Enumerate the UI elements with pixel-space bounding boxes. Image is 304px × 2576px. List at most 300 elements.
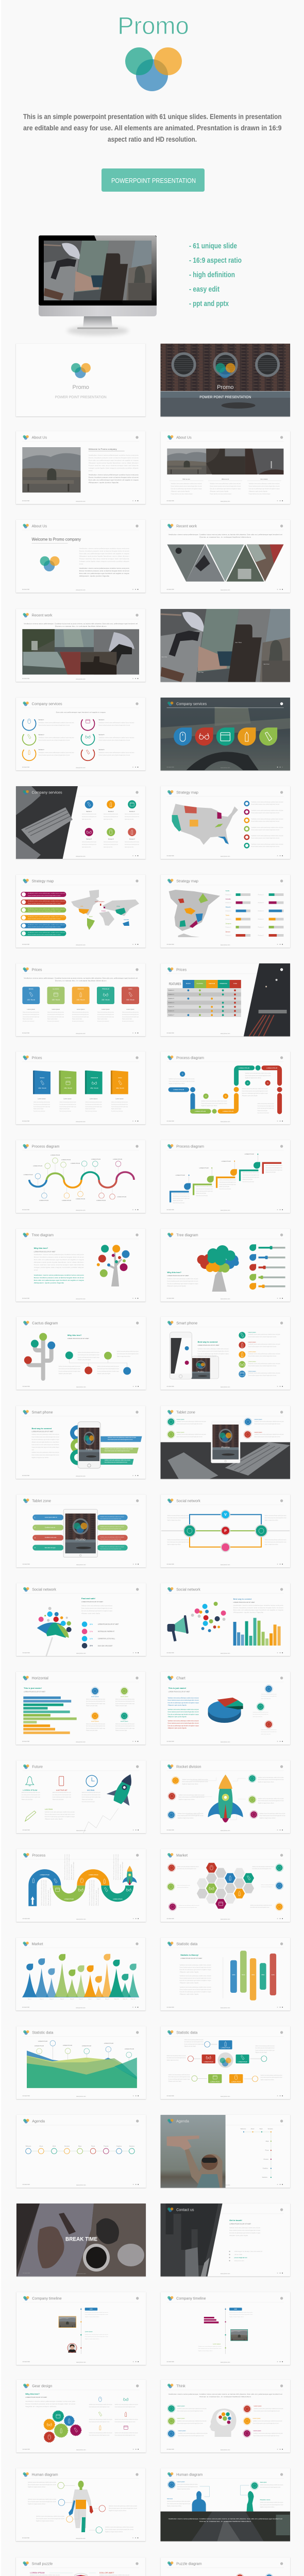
slide 14: Strategy map Spain: Sevilla bbox=[226, 890, 230, 892]
slide 14: Strategy map Spain: Product 1 bbox=[226, 893, 231, 895]
slide 30: Social network megaphone and bars: Best way to connect bbox=[233, 1598, 252, 1600]
slide 15: Prices cards: Lorem ipsum bbox=[52, 1008, 60, 1010]
slide 5: About Us welcome: Welcome to Promo company bbox=[32, 537, 81, 542]
slide 41: Agenda timeline: Welcome bbox=[26, 2145, 31, 2147]
slide 45: Company timeline left: Company timeline bbox=[32, 2296, 62, 2301]
slide 50: Human diagram silhouettes: Human diagram bbox=[176, 2472, 202, 2477]
slide 42: Agenda photo and timeline: Process bbox=[264, 2158, 269, 2160]
slide 24: Smart phone pair bbox=[161, 1317, 290, 1390]
slide 44: Contact us city photo bbox=[161, 2204, 290, 2276]
slide 18: Process diagram pipes: 1 bbox=[182, 1073, 183, 1075]
slide 11: Company services keyboard: Service 6 bbox=[129, 838, 135, 840]
tree with coloured fruit bbox=[97, 1245, 130, 1286]
slide 8: full-bleed photo slices bbox=[161, 609, 290, 682]
slide 38: Statistic data vertical pills: LOREM IPSUM DOLOR SIT AMET bbox=[180, 1957, 202, 1959]
feature list: - high definition bbox=[189, 271, 235, 279]
slide 41: Agenda timeline: About bbox=[39, 2145, 43, 2147]
slide 14: Strategy map Spain: Product 1 bbox=[226, 918, 231, 920]
slide 24: Smart phone pair: Lorem ipsum bbox=[248, 1341, 256, 1343]
slide 22: Tree diagram cloud: Tree diagram bbox=[176, 1233, 198, 1238]
slide 19: Process diagram wave: LOREM IPSUM bbox=[71, 1162, 80, 1164]
slide 34: Rocket division bbox=[161, 1760, 290, 1833]
intro paragraph bbox=[23, 112, 282, 143]
slide 37: Market triangles: Step 5 bbox=[70, 1998, 74, 2000]
slide 21: Tree diagram balls: Tree diagram bbox=[32, 1233, 54, 1238]
slide 48: Think head: Lorem ipsum bbox=[254, 2405, 262, 2407]
slide 11: Company services keyboard: Service 5 bbox=[108, 838, 114, 840]
slide 38: Statistic data vertical pills: 35% bbox=[261, 1974, 265, 1976]
slide 19: Process diagram wave: LOREM IPSUM bbox=[61, 1159, 71, 1161]
slide 15: Prices cards: Lorem ipsum bbox=[126, 1008, 135, 1010]
slide 50: Human diagram silhouettes bbox=[161, 2468, 290, 2541]
slide 8: full-bleed photo slices: Item Four bbox=[264, 663, 269, 665]
slide 44: Contact us city photo: promo.info@mail.com bbox=[234, 2257, 247, 2259]
slide 4: About Us three photos: Who we are bbox=[182, 478, 190, 480]
slide 19: Process diagram wave: LOREM IPSUM bbox=[50, 1154, 60, 1156]
slide 18: Process diagram pipes: 3 bbox=[225, 1095, 227, 1097]
slide 24: Smart phone pair: LOREM IPSUM DOLOR SIT AMET bbox=[198, 1344, 219, 1346]
slide 23: Cactus diagram: Cactus diagram bbox=[32, 1321, 58, 1326]
slide 39: Statistic data area chart: LOREM IPSUM bbox=[125, 2048, 134, 2050]
slide 16: Prices feature table: KING bbox=[233, 982, 238, 985]
slide 29: Social network umbrella: Fast and safe! bbox=[81, 1597, 95, 1600]
slide 16: Prices feature table: Feature 6 bbox=[168, 1010, 174, 1012]
world map: France bbox=[102, 910, 106, 912]
megaphone bbox=[167, 1615, 189, 1641]
slide 22: Tree diagram cloud: Why this tree? bbox=[167, 1271, 182, 1274]
slide 15: Prices cards: Lorem ipsum bbox=[102, 1008, 110, 1010]
slide 29: Social network umbrella: 29% bbox=[90, 1645, 93, 1647]
slide 14: Strategy map Spain: Product 1 bbox=[226, 926, 231, 928]
slide 39: Statistic data area chart bbox=[16, 2026, 146, 2099]
slide 41: Agenda timeline: Agenda bbox=[32, 2119, 45, 2124]
stacked area chart bbox=[27, 2050, 137, 2088]
slide 24: Smart phone pair: Best way to connect bbox=[198, 1341, 218, 1343]
slide 32: Chart 3D pie: Chart bbox=[176, 1676, 185, 1681]
feature list: - easy edit bbox=[189, 285, 219, 294]
slide 27: Tablet zone pills bbox=[16, 1495, 146, 1567]
slide 29: Social network umbrella: 14% bbox=[90, 1638, 93, 1640]
slide 37: Market triangles: Step 1 bbox=[28, 1998, 32, 2000]
slide 39: Statistic data area chart: LOREM IPSUM bbox=[82, 2045, 91, 2047]
slide 27: Tablet zone pills: Lorem ipsum dolor sit bbox=[45, 1517, 57, 1518]
slide 16: Prices feature table: Feature 1 bbox=[168, 989, 174, 991]
slide 25: Smart phone ribbons bbox=[16, 1406, 145, 1479]
slide 15: Prices cards: Vestibulum viverra varius pellentesque. Curabitur luctus erat ac justo viverra, ac lacinia nibh pharetra. Duis odio orci, pellentesque eget hendrerit vel bbox=[24, 977, 138, 979]
slide 35: Process snake with rocket: LOREM IPSUM bbox=[40, 1874, 49, 1876]
slide 9: Company services ring list: Service 2 bbox=[39, 734, 44, 736]
world map: United Kingdom bbox=[95, 901, 104, 903]
slide 44: Contact us city photo: +00 22 4 538 bbox=[234, 2253, 242, 2256]
slide 42: Agenda photo and timeline: Maps bbox=[266, 2140, 269, 2142]
slide 14: Strategy map Spain: Strategy map bbox=[176, 879, 198, 884]
feature list: - 61 unique slide bbox=[189, 242, 237, 250]
phone mockups bbox=[170, 1332, 219, 1379]
slide 37: Market triangles: Step 11 bbox=[123, 1998, 128, 2000]
slide 24: Smart phone pair: Lorem ipsum bbox=[248, 1370, 256, 1372]
slide 18: Process diagram pipes: LOREM IPSUM bbox=[266, 1067, 278, 1069]
slide 50: Human diagram silhouettes: Donec a massa leo, in volutpat facilisis bibendum bbox=[199, 2520, 251, 2522]
slide 39: Statistic data area chart: LOREM IPSUM bbox=[104, 2042, 113, 2044]
world map: China bbox=[116, 905, 120, 907]
slide 31: Horizontal bars: Lorem ipsum bbox=[121, 1696, 128, 1698]
slide 44: Contact us city photo: www.promo.com bbox=[234, 2260, 244, 2262]
slide 19: Process diagram wave: LOREM IPSUM bbox=[113, 1158, 122, 1160]
slide 48: Think head: Lorem ipsum bbox=[178, 2430, 186, 2432]
slide 4: About Us three photos: About Us bbox=[176, 435, 192, 440]
slide 17: Prices product boxes: Prices bbox=[32, 1056, 42, 1060]
logo: three overlapping circles bbox=[125, 47, 182, 91]
slide 42: Agenda photo and timeline: Work bbox=[260, 2128, 263, 2130]
slide 15: Prices cards: Prices bbox=[32, 968, 42, 972]
slide 33: Future rocket bbox=[16, 1760, 146, 1833]
slide 9: Company services ring list bbox=[16, 698, 145, 771]
slide 2: Promo cover on brick wall: Promo bbox=[217, 384, 234, 391]
slide 27: Tablet zone pills: 4 bbox=[35, 1547, 36, 1549]
slide 29: Social network umbrella: Social network bbox=[32, 1587, 56, 1592]
slide 44: Contact us city photo: 1780 Rutgers St, Brooklyn, New York 11234 NY bbox=[234, 2250, 263, 2252]
slide 33: Future rocket: IACINIA bbox=[87, 1789, 95, 1791]
slide 43: Break time photo bbox=[16, 2204, 146, 2276]
slide 50: Human diagram silhouettes: Null amet bbox=[167, 2498, 173, 2500]
feature list: - ppt and pptx bbox=[189, 300, 229, 308]
slide 3: About Us with photo: About Us bbox=[32, 435, 47, 440]
slide 42: Agenda photo and timeline: Welcome bbox=[241, 2128, 246, 2130]
slide 22: Tree diagram cloud: LOREM IPSUM DOLOR SIT AMET bbox=[167, 1275, 189, 1277]
slide 15: Prices cards: 15$ / Month bbox=[52, 998, 60, 1001]
slide 23: Cactus diagram: Why this tree? bbox=[67, 1334, 82, 1336]
slide 26: Tablet zone over keyboard photo: Lorem ipsum bbox=[177, 1431, 184, 1433]
slide 30: Social network megaphone and bars: LOREM IPSUM DOLOR SIT AMET bbox=[233, 1601, 255, 1603]
slide 21: Tree diagram balls: LOREM IPSUM DOLOR SIT AMET bbox=[34, 1250, 56, 1252]
slide 42: Agenda photo and timeline: Statistics bbox=[262, 2176, 268, 2178]
slide 33: Future rocket: LOREM IPSUM bbox=[23, 1789, 37, 1791]
slide 39: Statistic data area chart: LOREM IPSUM bbox=[38, 2040, 47, 2042]
slide 18: Process diagram pipes: 5 bbox=[267, 1082, 268, 1084]
slide 1: Promo cover: Promo bbox=[72, 384, 89, 391]
button: PowerPoint presentation: POWERPOINT PRESENTATION bbox=[111, 177, 196, 184]
slide 20: Process diagram stairs: LOREM IPSUM bbox=[245, 1153, 254, 1155]
slide 9: Company services ring list: Service 4 bbox=[99, 719, 105, 721]
slide 44: Contact us city photo: Contact us bbox=[176, 2208, 194, 2212]
slide 25: Smart phone ribbons: Smart phone bbox=[32, 1410, 53, 1415]
slide 42: Agenda photo and timeline: Services bbox=[268, 2128, 273, 2130]
slide 29: Social network umbrella: LOREM IPSUM DOLOR SIT AMET bbox=[98, 1623, 119, 1625]
slide 26: Tablet zone over keyboard photo: Lorem ipsum bbox=[177, 1418, 184, 1420]
slide 25: Smart phone ribbons: LOREM IPSUM DOLOR SIT AMET bbox=[32, 1430, 54, 1432]
slide 16: Prices feature table: Feature 7 bbox=[168, 1014, 174, 1016]
slide 30: Social network megaphone and bars bbox=[161, 1583, 290, 1656]
slide 33: Future rocket: Future bbox=[32, 1765, 43, 1769]
slide 47: Gear design bbox=[16, 2380, 146, 2452]
slide 17: Prices product boxes: KING bbox=[118, 1077, 122, 1079]
slide 44: Contact us city photo: Get in touch! bbox=[229, 2219, 242, 2222]
slide 17: Prices product boxes: 25$ / Month bbox=[90, 1087, 98, 1089]
slide 19: Process diagram wave: Process diagram bbox=[32, 1144, 59, 1149]
slide 17: Prices product boxes: Lorem ipsum bbox=[38, 1097, 46, 1099]
gears bbox=[44, 2411, 81, 2442]
slide 49: Human diagram body: Human diagram bbox=[32, 2472, 58, 2477]
slide 1: Promo cover: POWER POINT PRESENTATION bbox=[55, 396, 107, 399]
slide 16: Prices feature table: MEDIUM bbox=[209, 982, 215, 985]
slide 14: Strategy map Spain bbox=[161, 875, 290, 948]
triangle peaks chart bbox=[22, 1963, 139, 1997]
slide 31: Horizontal bars: Horizontal bbox=[32, 1676, 48, 1681]
slide 52: Puzzle diagram: Puzzle diagram bbox=[176, 2562, 202, 2566]
slide 7: Recent work collage: Vestibulum viverra varius pellentesque. Curabitur luctus erat ac justo viverra, ac lacinia nibh pharetra. Duis odio orci, pellentesque eget hendrerit vel bbox=[24, 622, 138, 624]
slide 14: Strategy map Spain: Zaragoza bbox=[226, 922, 231, 924]
slide 41: Agenda timeline: Maps bbox=[78, 2145, 82, 2147]
slide 45: Company timeline left: Lorem ipsum bbox=[85, 2331, 93, 2333]
slide 15: Prices cards: Donec a massa leo, in volutpat facilisis bibendum bbox=[55, 980, 107, 982]
slide 17: Prices product boxes: CLASSIC bbox=[65, 1077, 72, 1079]
slide 30: Social network megaphone and bars: Social network bbox=[176, 1587, 200, 1592]
slide 33: Future rocket: LACINIA bbox=[45, 1808, 53, 1810]
slide 29: Social network umbrella: LOREM IPSUM DOLOR SIT AMET bbox=[81, 1601, 103, 1603]
slide 47: Gear design: LOREM IPSUM DOLOR SIT AMET bbox=[25, 2396, 47, 2398]
slide 41: Agenda timeline: Work bbox=[53, 2145, 56, 2147]
slide 37: Market triangles: Step 2 bbox=[40, 1998, 44, 2000]
slide 24: Smart phone pair: Lorem ipsum bbox=[248, 1361, 256, 1363]
slide 41: Agenda timeline bbox=[16, 2115, 146, 2188]
slide 5: About Us welcome bbox=[16, 520, 145, 592]
slide 37: Market triangles: Market bbox=[32, 1942, 43, 1946]
slide 38: Statistic data vertical pills: 51% bbox=[242, 1974, 245, 1976]
slide 51: Small puzzle bulb bbox=[16, 2557, 145, 2576]
slide 7: Recent work collage bbox=[16, 609, 145, 682]
slide 38: Statistic data vertical pills: 41% bbox=[272, 1974, 275, 1976]
slide 6: Recent work triangles: Vestibulum viverra varius pellentesque. Curabitur luctus erat ac justo viverra, ac lacinia nibh pharetra. Duis odio orci, pellentesque eget hendrerit vel bbox=[168, 534, 282, 536]
slide 14: Strategy map Spain: Product 2 bbox=[258, 926, 264, 928]
slide 46: Company timeline right: Company timeline bbox=[176, 2296, 206, 2301]
slide 14: Strategy map Spain: Product 1 bbox=[226, 902, 231, 904]
slide 18: Process diagram pipes: 4 bbox=[247, 1082, 248, 1084]
slide 16: Prices feature table: Prices bbox=[176, 968, 187, 972]
slide 28: Social network links: V bbox=[224, 1513, 227, 1517]
slide 41: Agenda timeline: Prices bbox=[91, 2145, 95, 2147]
slide 41: Agenda timeline: Statistics bbox=[129, 2145, 135, 2147]
slide 6: Recent work triangles: Recent work bbox=[176, 524, 197, 529]
slide 16: Prices feature table: CLASSIC bbox=[196, 982, 204, 985]
slide 8: full-bleed photo slices: Item Three bbox=[235, 641, 242, 643]
slide 14: Strategy map Spain: Zamora bbox=[226, 930, 230, 933]
slide 19: Process diagram wave: LOREM IPSUM bbox=[24, 1174, 33, 1176]
slide 16: Prices feature table: BASIC bbox=[186, 982, 191, 985]
slide 12: Strategy map USA bbox=[161, 786, 290, 859]
slide 28: Social network links: P bbox=[224, 1529, 227, 1533]
slide 13: Strategy map world: Strategy map bbox=[32, 879, 54, 884]
slide 11: Company services keyboard: Service 1 bbox=[86, 810, 92, 812]
slide 38: Statistic data vertical pills: Statistic is Money! bbox=[180, 1954, 198, 1956]
slide 32: Chart 3D pie: This is just easier! bbox=[168, 1687, 187, 1689]
slide 9: Company services ring list: Service 5 bbox=[99, 734, 105, 736]
slide 41: Agenda timeline: Process bbox=[104, 2145, 109, 2147]
slide 16: Prices feature table: PREMIUM bbox=[220, 982, 227, 985]
slide 42: Agenda photo and timeline: About bbox=[251, 2128, 255, 2130]
slide 21: Tree diagram balls bbox=[16, 1229, 145, 1301]
rocket bbox=[105, 1769, 142, 1808]
slide 19: Process diagram wave: LOREM IPSUM bbox=[33, 1165, 42, 1167]
slide 37: Market triangles: Step 12 bbox=[131, 1998, 136, 2000]
slide 19: Process diagram wave: LOREM IPSUM bbox=[62, 1199, 71, 1201]
slide 35: Process snake with rocket: LOREM IPSUM bbox=[89, 1874, 98, 1876]
slide 38: Statistic data vertical pills: 19% bbox=[232, 1974, 235, 1976]
slide 17: Prices product boxes: 30$ / Month bbox=[116, 1087, 124, 1089]
slide 27: Tablet zone pills: 1 bbox=[35, 1517, 36, 1519]
slide 38: Statistic data vertical pills: Statistic data bbox=[176, 1942, 197, 1946]
slide 50: Human diagram silhouettes: Phasellus viverra bbox=[260, 2499, 271, 2501]
slide 20: Process diagram stairs: LOREM IPSUM bbox=[199, 1167, 209, 1169]
slide 37: Market triangles bbox=[16, 1938, 145, 2010]
slide 17: Prices product boxes: Lorem ipsum bbox=[90, 1097, 98, 1099]
slide 15: Prices cards: Lorem ipsum bbox=[27, 1008, 36, 1010]
world map: USA bbox=[80, 905, 83, 907]
slide 31: Horizontal bars: LOREM IPSUM DOLOR SIT AMET bbox=[24, 1691, 45, 1693]
slide 17: Prices product boxes: Lorem ipsum bbox=[115, 1097, 124, 1099]
slide 20: Process diagram stairs: Process diagram bbox=[176, 1144, 204, 1149]
pie chart bbox=[208, 1698, 243, 1723]
slide 22: Tree diagram cloud bbox=[161, 1229, 290, 1301]
slide 39: Statistic data area chart: LOREM IPSUM bbox=[35, 2045, 44, 2047]
slide 36: Market hexagons: Market bbox=[176, 1853, 188, 1858]
slide 11: Company services keyboard: Service 4 bbox=[86, 838, 92, 840]
slide 15: Prices cards: 10$ / Month bbox=[27, 998, 36, 1001]
slide 4: About Us three photos: Our mission bbox=[260, 478, 268, 480]
slide 10: Company services dark drops: Company services bbox=[176, 702, 207, 706]
slide 32: Chart 3D pie: LOREM IPSUM DOLOR SIT AMET bbox=[168, 1691, 190, 1693]
slide 48: Think head: Vestibulum viverra varius pellentesque. Curabitur luctus erat ac justo viverra, ac lacinia nibh pharetra. Duis odio orci, pellentesque eget hendrerit vel bbox=[168, 2393, 282, 2395]
slide 38: Statistic data vertical pills: 16% bbox=[251, 1974, 255, 1976]
slide 35: Process snake with rocket: LOREM IPSUM bbox=[113, 1898, 122, 1900]
slide 48: Think head: Lorem ipsum bbox=[177, 2405, 185, 2407]
slide 18: Process diagram pipes: LOREM IPSUM bbox=[239, 1067, 250, 1069]
slide 18: Process diagram pipes bbox=[161, 1052, 290, 1124]
slide 16: Prices feature table: FEATURES bbox=[169, 983, 181, 986]
slide 29: Social network umbrella: DUIS ODIO ORCI EGET bbox=[98, 1645, 113, 1647]
slide 40: Statistic data nodes: LOREM IPSUM bbox=[231, 2080, 241, 2082]
feature list: - 16:9 aspect ratio bbox=[189, 257, 242, 265]
slide 17: Prices product boxes: Lorem ipsum bbox=[63, 1097, 72, 1099]
slide 48: Think head: Lorem ipsum bbox=[254, 2430, 261, 2432]
bar chart bbox=[233, 1618, 281, 1646]
slide 15: Prices cards: Lorem ipsum bbox=[77, 1008, 85, 1010]
slide 29: Social network umbrella: 45% bbox=[90, 1623, 93, 1625]
slide 37: Market triangles: Step 9 bbox=[105, 1998, 109, 2000]
slide 17: Prices product boxes bbox=[16, 1052, 145, 1124]
slide 12: Strategy map USA: Strategy map bbox=[176, 790, 198, 795]
slide 50: Human diagram silhouettes: Lorem ipsum bbox=[177, 2481, 185, 2483]
slide 50: Human diagram silhouettes: Vestibulum viverra varius pellentesque. Curabitur luctus erat ac justo viverra, ac lacinia nibh pharetra. Duis odio orci, pellentesque eget hendrerit vel bbox=[168, 2518, 282, 2520]
slide 48: Think head bbox=[161, 2380, 290, 2452]
slide 20: Process diagram stairs: LOREM IPSUM bbox=[222, 1160, 231, 1162]
slide 14: Strategy map Spain: Product 2 bbox=[258, 935, 264, 937]
human figure bbox=[69, 2481, 93, 2532]
monitor mockup with screen bbox=[39, 235, 157, 335]
slide 40: Statistic data nodes: LOREM IPSUM bbox=[210, 2080, 219, 2082]
slide 19: Process diagram wave: LOREM IPSUM bbox=[117, 1196, 126, 1198]
slide 37: Market triangles: Step 10 bbox=[114, 1998, 119, 2000]
slide 31: Horizontal bars: Lorem ipsum bbox=[91, 1720, 99, 1722]
slide 27: Tablet zone pills: 2 bbox=[35, 1527, 36, 1529]
slide 14: Strategy map Spain: Granada bbox=[226, 898, 231, 900]
slide 27: Tablet zone pills: Curabitur luctus at bbox=[45, 1527, 55, 1528]
slide 15: Prices cards: CLASSIC bbox=[53, 988, 60, 990]
slide 37: Market triangles: Step 6 bbox=[79, 1998, 83, 2000]
slide 15: Prices cards: KING bbox=[128, 988, 132, 990]
slide 31: Horizontal bars: This is just easier! bbox=[24, 1687, 42, 1689]
slide 14: Strategy map Spain: Product 1 bbox=[226, 935, 231, 937]
slide 15: Prices cards: 25$ / Month bbox=[102, 998, 110, 1001]
slide 39: Statistic data area chart: LOREM IPSUM bbox=[63, 2044, 72, 2046]
slide 15: Prices cards: 20$ / Month bbox=[77, 998, 85, 1001]
slide 18: Process diagram pipes: Process diagram bbox=[176, 1056, 204, 1060]
slide 43: Break time photo: BREAK TIME bbox=[65, 2236, 97, 2243]
USA map bbox=[172, 804, 238, 845]
slide 6: Recent work triangles bbox=[161, 520, 290, 592]
world map: Australia bbox=[124, 919, 129, 921]
slide 8: full-bleed photo slices: Item One bbox=[162, 656, 167, 658]
slide 15: Prices cards: PREMIUM bbox=[102, 988, 110, 990]
slide 15: Prices cards: 30$ / Month bbox=[126, 998, 134, 1001]
slide 14: Strategy map Spain: Product 2 bbox=[258, 902, 264, 904]
slide 16: Prices feature table: Feature 5 bbox=[168, 1006, 174, 1008]
slide 2: Promo cover on brick wall: POWER POINT PRESENTATION bbox=[199, 396, 251, 399]
slide 25: Smart phone ribbons: Best way to connect bbox=[32, 1427, 52, 1430]
slide 50: Human diagram silhouettes: Ideal spiral bbox=[260, 2481, 267, 2483]
slide 48: Think head: Think bbox=[176, 2384, 185, 2388]
slide 42: Agenda photo and timeline: Graphics bbox=[263, 2167, 268, 2169]
slide 24: Smart phone pair: Lorem ipsum bbox=[248, 1351, 256, 1353]
slide 47: Gear design: Why this tree? bbox=[25, 2393, 40, 2395]
slide 21: Tree diagram balls: Why this tree? bbox=[34, 1247, 48, 1249]
puzzle pieces bbox=[67, 2575, 95, 2576]
slide 43: Break time photo: www.promo.com bbox=[76, 2273, 86, 2275]
intro paragraph: aspect ratio and HD resolution. bbox=[108, 135, 197, 143]
slide 31: Horizontal bars: Lorem ipsum bbox=[121, 1720, 128, 1722]
slide 19: Process diagram wave bbox=[16, 1140, 145, 1213]
slide 26: Tablet zone over keyboard photo: Lorem ipsum bbox=[255, 1418, 262, 1420]
slide 35: Process snake with rocket: Process bbox=[32, 1853, 46, 1858]
slide 35: Process snake with rocket: LOREM IPSUM bbox=[64, 1898, 74, 1900]
slide 48: Think head: Lorem ipsum bbox=[253, 2417, 261, 2419]
slide 16: Prices feature table: Feature 2 bbox=[168, 993, 174, 995]
slide 11: Company services keyboard: Service 3 bbox=[129, 810, 135, 812]
slide 47: Gear design: Gear design bbox=[32, 2384, 52, 2388]
slide 7: Recent work collage: Donec a massa leo, in volutpat facilisis bibendum bbox=[55, 625, 107, 628]
slide 29: Social network umbrella: VESTIBULUM VIVERRA AT bbox=[98, 1631, 114, 1633]
slide 1: Promo cover bbox=[16, 344, 145, 416]
bar chart bbox=[23, 1697, 77, 1734]
slide 48: Think head: Lorem ipsum bbox=[177, 2417, 185, 2419]
button: PowerPoint presentation bbox=[102, 168, 205, 192]
slide 40: Statistic data nodes: LOREM IPSUM bbox=[221, 2046, 230, 2048]
slide 17: Prices product boxes: 10$ / Month bbox=[38, 1087, 46, 1089]
slide 14: Strategy map Spain: Albacete bbox=[226, 906, 231, 908]
slide 18: Process diagram pipes: 2 bbox=[205, 1095, 207, 1097]
slide 14: Strategy map Spain: Product 1 bbox=[226, 910, 231, 912]
slide 31: Horizontal bars: Lorem ipsum bbox=[91, 1696, 99, 1698]
slide 45: Company timeline left bbox=[16, 2292, 146, 2365]
slide 38: Statistic data vertical pills bbox=[161, 1938, 290, 2010]
slide 5: About Us welcome: About Us bbox=[32, 524, 47, 529]
slide 37: Market triangles: Step 4 bbox=[60, 1998, 64, 2000]
slide 23: Cactus diagram bbox=[16, 1317, 146, 1390]
slide 14: Strategy map Spain: Product 2 bbox=[258, 893, 264, 895]
slide 29: Social network umbrella bbox=[16, 1583, 146, 1656]
slide 16: Prices feature table: Feature 4 bbox=[168, 1002, 174, 1004]
slide 46: Company timeline right: Lorem ipsum bbox=[213, 2343, 221, 2345]
slide 7: Recent work collage: Recent work bbox=[32, 613, 53, 618]
